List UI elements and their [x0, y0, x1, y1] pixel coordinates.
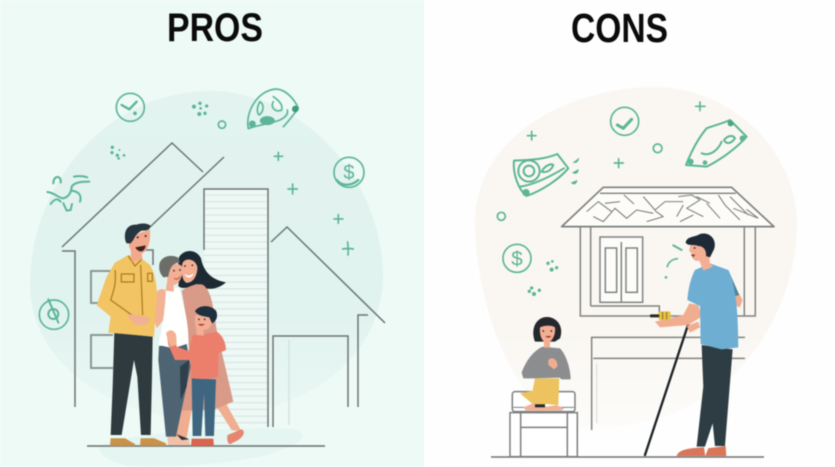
- front woman arm: [153, 289, 166, 328]
- chair: [510, 392, 577, 457]
- boy face: [195, 314, 213, 336]
- drill tool: [650, 311, 671, 320]
- man shirt details: [111, 256, 152, 315]
- woman legs: [173, 402, 242, 438]
- boy shirt: [188, 332, 226, 379]
- figures: cons: [503, 234, 743, 457]
- man pants: [111, 333, 153, 435]
- icon: target: [39, 299, 69, 329]
- icon: dots: [192, 102, 208, 116]
- man face: [129, 229, 150, 262]
- green icons and family: [39, 224, 353, 446]
- woman hair back: [178, 251, 226, 289]
- green icons: cons top: [497, 102, 747, 220]
- front woman face: [166, 264, 182, 292]
- heading: pros: PROS: [167, 6, 263, 50]
- boy arm: [167, 331, 192, 360]
- icon: rings: [497, 144, 662, 220]
- girl eyes and mouth: [542, 330, 552, 338]
- boy eyes and mouth: [198, 318, 205, 326]
- man back arm: [732, 294, 743, 307]
- front woman top: [159, 288, 188, 348]
- woman foot: [227, 429, 244, 444]
- man hair: [686, 234, 715, 257]
- window: [600, 237, 643, 302]
- man mouth and eye: [691, 247, 695, 257]
- icon: plus signs: [274, 152, 343, 223]
- person: front woman: [153, 256, 191, 445]
- panel: cons: [424, 0, 835, 467]
- house line art: pros: [62, 143, 385, 427]
- icon: small ring: [218, 121, 226, 128]
- man trousers: [697, 345, 733, 447]
- man face: [689, 241, 713, 271]
- house line art: cons: [580, 227, 755, 430]
- man shirt: [687, 263, 738, 349]
- man hair: [125, 224, 151, 243]
- green icons: pros top: [47, 89, 364, 223]
- icon: leaves: [571, 158, 579, 184]
- front woman pants: [158, 344, 191, 437]
- man shirt: [97, 255, 157, 337]
- ground line: pros: [87, 445, 325, 447]
- icon: spark marks: [665, 245, 682, 279]
- icon: dollar coin: [334, 157, 364, 187]
- man hands: [127, 314, 150, 325]
- icon: money blob: [248, 89, 299, 129]
- front woman hair: [159, 256, 180, 277]
- icon: plus signs: [527, 102, 705, 168]
- boy hair: [195, 306, 217, 323]
- icon: dots: [528, 260, 558, 296]
- boy pants: [192, 378, 216, 436]
- cane: [645, 324, 688, 455]
- person: back woman: [173, 251, 244, 444]
- icon: dollar coin: $: [511, 248, 523, 271]
- background blob: pros: [30, 91, 383, 420]
- woman face: [182, 259, 197, 283]
- background blob: cons: [475, 87, 797, 427]
- ground line: cons: [491, 456, 764, 458]
- girl hands: [548, 358, 557, 369]
- woman smile and eyes: [184, 264, 194, 278]
- icon: dots left: [110, 146, 125, 160]
- woman dress: [180, 284, 233, 411]
- icon: clock check: [116, 93, 144, 121]
- person: man: [97, 224, 166, 446]
- boy shoes: [191, 439, 214, 446]
- girl feet: [523, 403, 564, 411]
- heading: cons: CONS: [571, 5, 668, 51]
- man shoes: [677, 446, 726, 456]
- icon: money left: [514, 154, 568, 196]
- front woman eyes and mouth: [173, 269, 181, 279]
- shutter door: [204, 189, 268, 427]
- icon: check badge: [611, 107, 639, 135]
- person: man with cane: [645, 234, 743, 456]
- icon: squiggle: [47, 176, 89, 211]
- front woman shoes: [167, 437, 190, 445]
- man front arm: [655, 303, 702, 327]
- person: boy: [166, 306, 226, 446]
- icon: money right: [686, 120, 747, 167]
- icon: dollar coin: [503, 244, 531, 272]
- panel: pros: [0, 0, 424, 467]
- girl sweater: [522, 347, 571, 379]
- ground shadow: pros: [99, 428, 302, 467]
- icon: dollar coin: $: [343, 162, 355, 184]
- man mouth and eyes: [135, 235, 147, 251]
- girl head: [533, 317, 561, 342]
- icon: plus lower: [343, 242, 353, 255]
- person: girl: [520, 317, 571, 411]
- man shoes: [110, 438, 166, 446]
- girl trousers: [520, 378, 559, 406]
- cracked roof: [562, 187, 774, 227]
